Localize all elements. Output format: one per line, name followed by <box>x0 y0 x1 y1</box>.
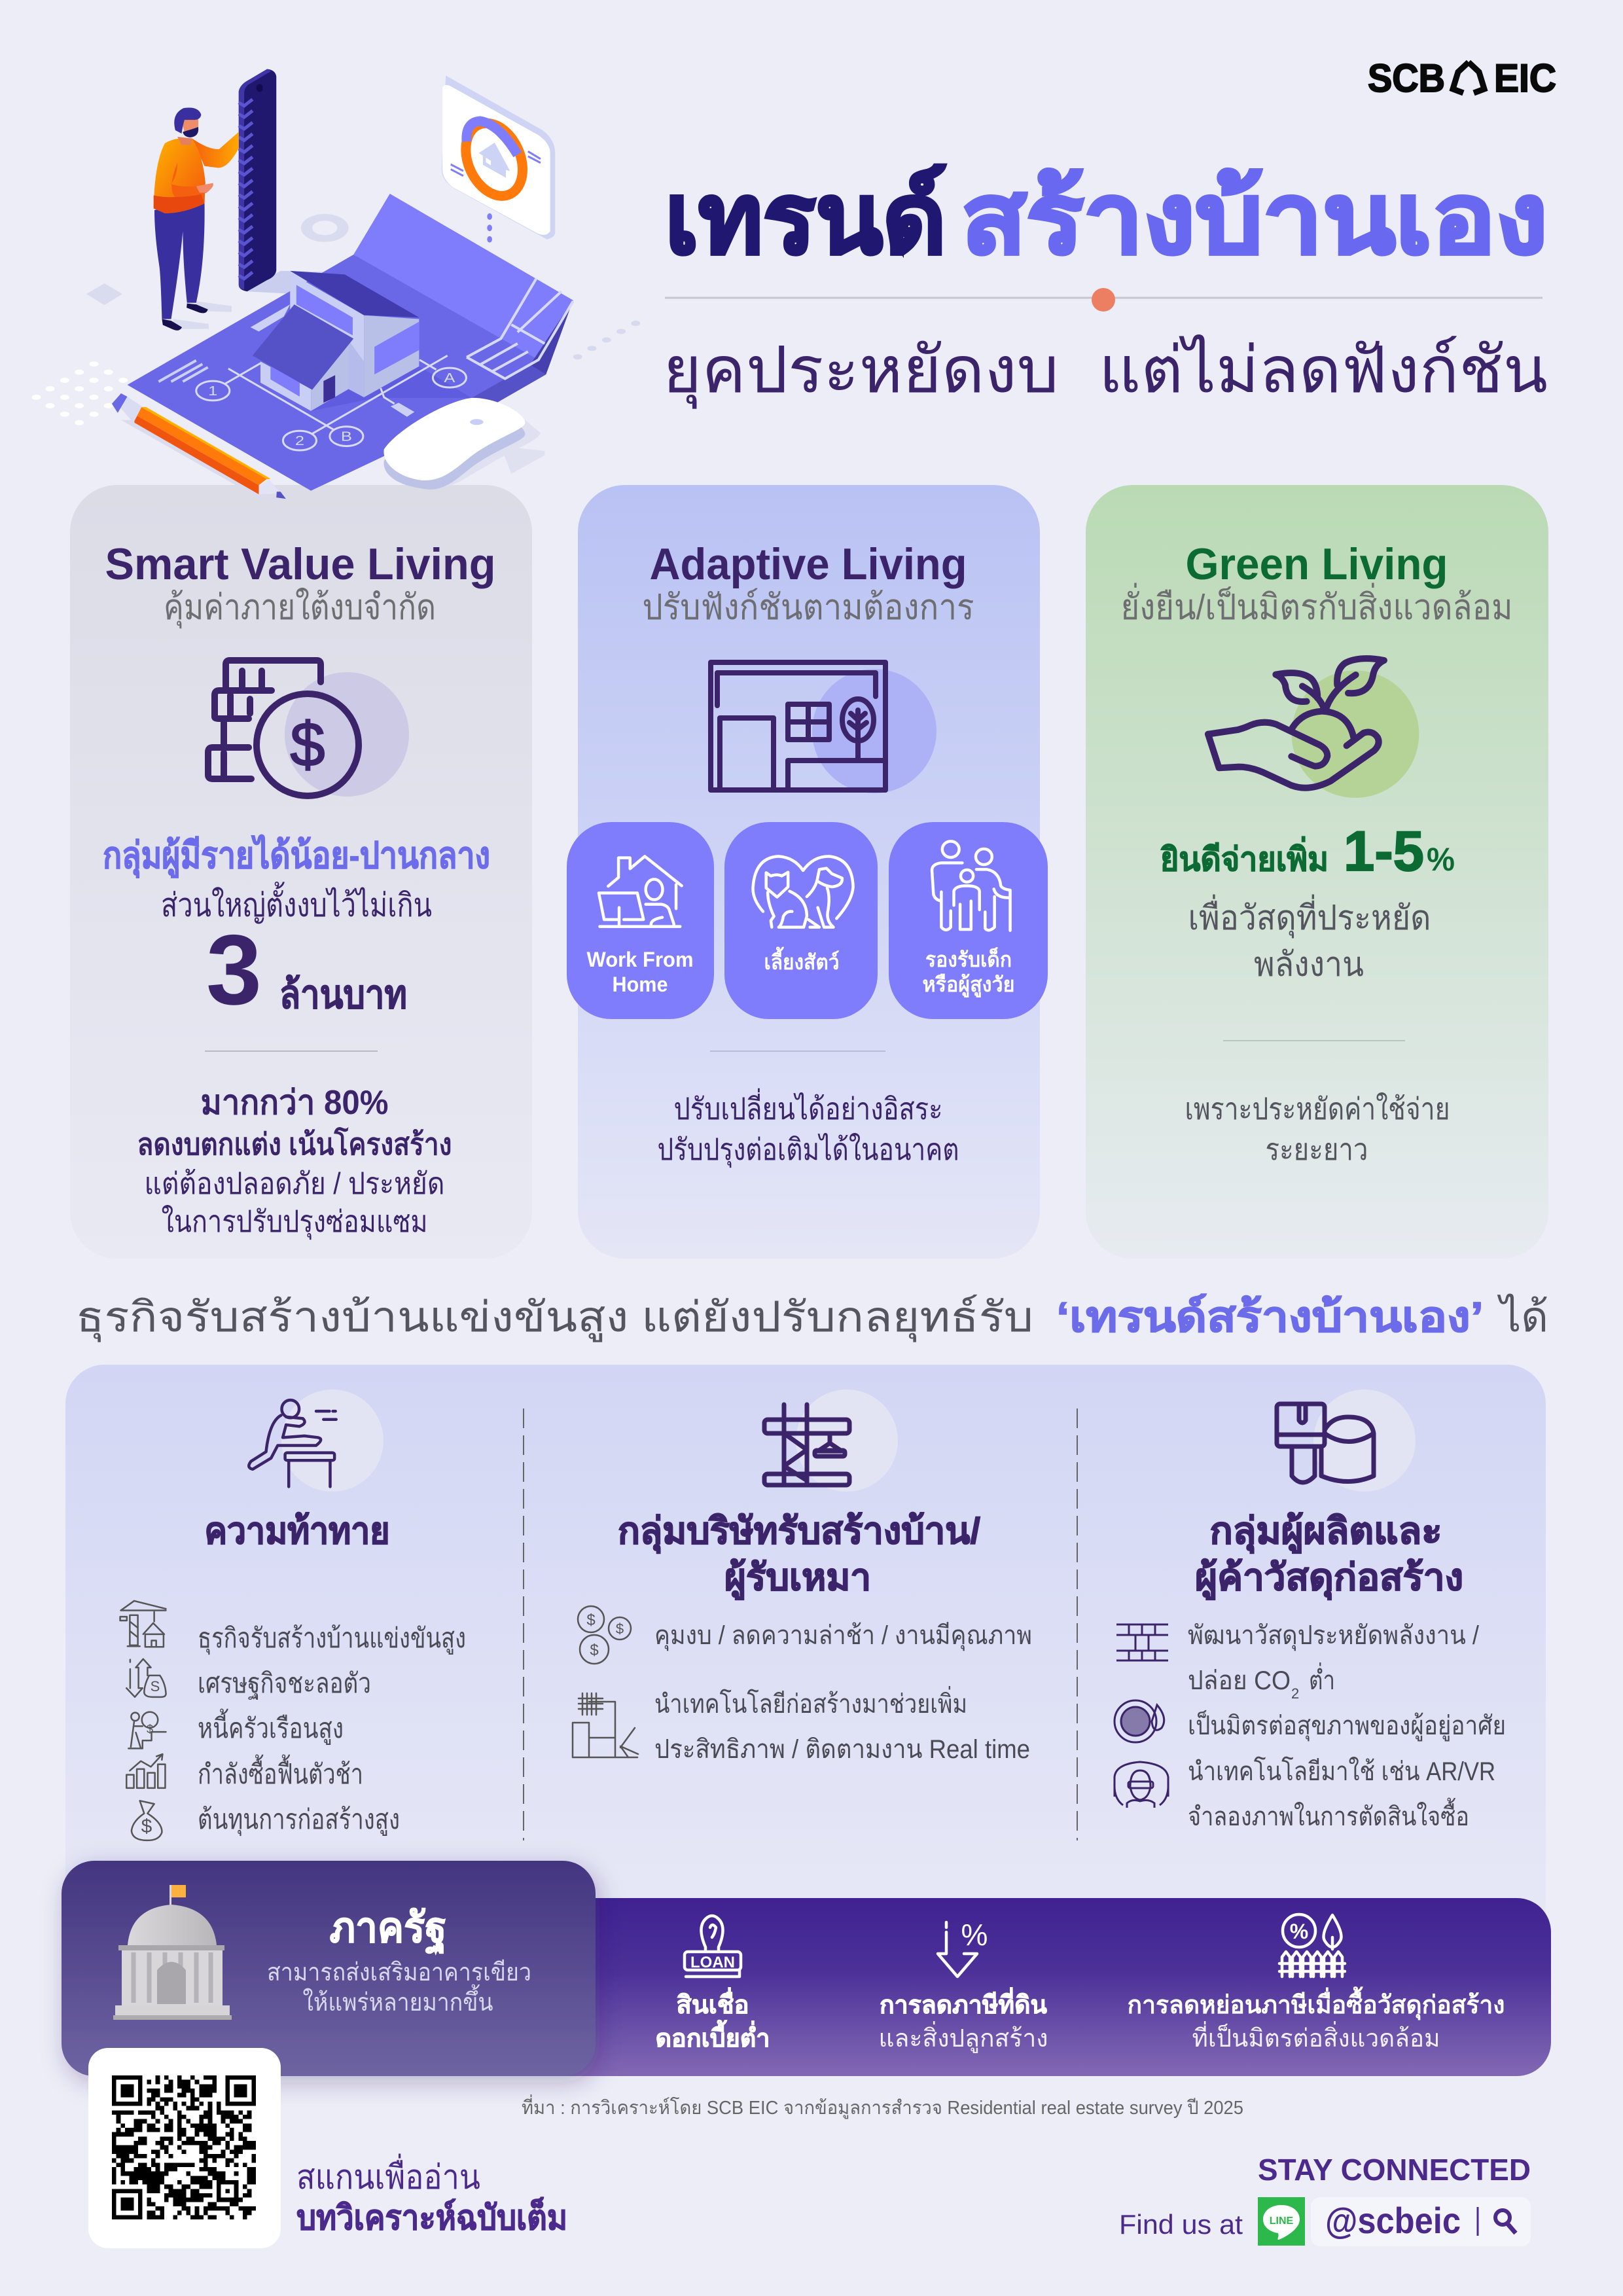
blueprint labels: 1 <box>208 384 217 398</box>
panel: business strategies <box>65 1365 1546 1954</box>
builder list: นำเทคโนโลยีก่อสร้างมาช่วยเพิ่ม <box>654 1686 967 1719</box>
icon: earth and leaf <box>1115 1700 1164 1742</box>
column: material suppliers <box>1115 1390 1506 1831</box>
panel: Smart Value Living: แต่ต้องปลอดภัย / ประหยัด <box>144 1166 445 1200</box>
illustration: house blueprint and man <box>31 69 640 507</box>
heading: STAY CONNECTED <box>1258 2153 1531 2187</box>
icon glyphs: S <box>151 1678 160 1695</box>
icon glyphs <box>141 1678 160 1837</box>
icon: home office <box>599 856 682 927</box>
dots <box>31 361 128 425</box>
banner: government measures: ดอกเบี้ยต่ำ <box>656 2020 770 2053</box>
card: Work From Home <box>567 822 714 1019</box>
icon: coins: $ <box>586 1611 596 1629</box>
challenge list: เศรษฐกิจชะลอตัว <box>198 1668 371 1700</box>
section heading: ธุรกิจรับสร้างบ้านแข่งขันสูง แต่ยังปรับกลยุทธ์รับ <box>76 1293 1033 1342</box>
heading: กลุ่มบริษัทรับสร้างบ้าน/ <box>618 1510 980 1554</box>
column: home builders <box>573 1390 1032 1764</box>
challenge list: กำลังซื้อฟื้นตัวช้า <box>198 1754 363 1789</box>
budget unit: ล้านบาท <box>279 973 407 1016</box>
icon: loan stamp <box>685 1916 741 1977</box>
icon: down arrow percent: % <box>961 1918 988 1952</box>
source note: ที่มา : การวิเคราะห์โดย SCB EIC จากข้อมูลการสำรวจ Residential real estate survey ปี 2025 <box>522 2094 1243 2119</box>
energy text: เพื่อวัสดุที่ประหยัด <box>1188 894 1431 939</box>
blueprint labels: B <box>341 429 352 444</box>
budget line: ส่วนใหญ่ตั้งงบไว้ไม่เกิน <box>161 882 432 924</box>
stay connected block <box>1119 2153 1531 2246</box>
detail text: ลดงบตกแต่ง เน้นโครงสร้าง <box>137 1126 452 1161</box>
man <box>173 301 232 329</box>
icon: percent leaf fence <box>1279 1914 1345 1977</box>
blueprint labels <box>208 370 455 448</box>
challenge list <box>198 1623 466 1837</box>
board card <box>442 75 555 240</box>
willingness to pay: % <box>1427 841 1455 878</box>
icon: construction technology <box>573 1693 638 1757</box>
supplier list: ต่ำ <box>1309 1662 1335 1695</box>
card: family <box>889 822 1048 1019</box>
heading: กลุ่มผู้ผลิตและ <box>1209 1510 1442 1554</box>
search box: @scbeic <box>1325 2200 1461 2241</box>
builder list: ประสิทธิภาพ / ติดตามงาน Real time <box>654 1735 1030 1764</box>
heading: Green Living: Green Living <box>1186 539 1448 589</box>
icon: hand with seedling <box>1208 658 1419 798</box>
icon: paint brush and can <box>1277 1390 1416 1492</box>
body text: ปรับเปลี่ยนได้อย่างอิสระ <box>674 1088 942 1126</box>
icon: brick wall <box>1116 1624 1168 1660</box>
find us text: Find us at <box>1119 2209 1243 2240</box>
QR code <box>112 2077 256 2217</box>
card: government sector: ให้แพร่หลายมากขึ้น <box>302 1984 493 2017</box>
label: Work From <box>586 948 694 971</box>
mouse <box>501 446 544 474</box>
supplier list: พัฒนาวัสดุประหยัดพลังงาน / <box>1188 1621 1480 1651</box>
budget number: 3 <box>206 914 262 1026</box>
banner: government measures <box>524 1898 1551 2076</box>
icon: flexible room <box>711 662 936 793</box>
supplier list: จำลองภาพในการตัดสินใจซื้อ <box>1188 1797 1469 1831</box>
logo: SCB EIC: EIC <box>1494 56 1556 100</box>
column: home builders: ผู้รับเหมา <box>724 1556 871 1600</box>
panel: Green Living <box>1086 485 1548 1259</box>
icon: percent leaf fence: % <box>1290 1920 1308 1943</box>
reason text: เพราะประหยัดค่าใช้จ่าย <box>1185 1092 1450 1126</box>
ruler shadow <box>246 271 323 294</box>
QR code card <box>88 2048 281 2248</box>
ruler <box>239 69 276 291</box>
card: Work From Home: Home <box>613 973 668 996</box>
label: เลี้ยงสัตว์ <box>764 946 839 974</box>
target group text: กลุ่มผู้มีรายได้น้อย-ปานกลาง <box>103 834 490 878</box>
challenge list: หนี้ครัวเรือนสูง <box>198 1708 344 1745</box>
supplier list: ปล่อย CO <box>1188 1666 1291 1695</box>
panel: Green Living: ระยะยาว <box>1266 1132 1368 1166</box>
icon: coins: $ <box>616 1621 624 1637</box>
banner: government measures: และสิ่งปลูกสร้าง <box>878 2021 1048 2053</box>
heading: ภาครัฐ <box>330 1904 446 1954</box>
logo: SCB EIC: SCB <box>1368 56 1445 100</box>
card: government sector <box>62 1861 596 2076</box>
subheading: ยั่งยืน/เป็นมิตรกับสิ่งแวดล้อม <box>1120 583 1513 627</box>
title divider with dot <box>665 288 1543 312</box>
icon: down arrow percent <box>938 1918 988 1977</box>
willingness to pay: ยินดีจ่ายเพิ่ม <box>1160 836 1329 878</box>
icon: coins: $ <box>590 1641 599 1659</box>
willingness to pay <box>1160 820 1455 883</box>
title: สร้างบ้านเอง <box>961 164 1548 274</box>
blueprint <box>353 194 573 374</box>
scan text <box>296 2153 567 2237</box>
subheading: คุ้มค่าภายใต้งบจำกัด <box>164 587 436 629</box>
icon: bricks and coin: $ <box>290 709 325 780</box>
challenge list: ธุรกิจรับสร้างบ้านแข่งขันสูง <box>198 1623 466 1655</box>
panel: Adaptive Living: ปรับปรุงต่อเติมได้ในอนาคต <box>657 1132 959 1168</box>
section heading <box>76 1293 1548 1342</box>
subtitle: ยุคประหยัดงบ <box>663 334 1059 409</box>
challenge list: ต้นทุนการก่อสร้างสูง <box>198 1804 400 1837</box>
card: family: หรือผู้สูงวัย <box>923 973 1014 998</box>
supplier list: เป็นมิตรต่อสุขภาพของผู้อยู่อาศัย <box>1188 1710 1506 1742</box>
panel: Adaptive Living <box>567 485 1048 1259</box>
label: รองรับเด็ก <box>925 946 1012 971</box>
pencil <box>121 420 288 507</box>
stamp label: LOAN <box>690 1954 735 1971</box>
icon: coins <box>578 1606 631 1664</box>
section heading: ‘เทรนด์สร้างบ้านเอง’ <box>1056 1293 1484 1340</box>
supplier list: นำเทคโนโลยีมาใช้ เช่น AR/VR <box>1188 1756 1495 1786</box>
percent text: มากกว่า 80% <box>200 1084 389 1122</box>
icon: crane <box>764 1390 898 1492</box>
icon: family generations <box>932 841 1010 931</box>
icon: VR headset person <box>1115 1762 1168 1808</box>
icon: LINE <box>1258 2197 1305 2246</box>
heading: Smart Value Living: Smart Value Living <box>105 539 496 589</box>
title: เทรนด์ <box>665 164 946 274</box>
subheading: ปรับฟังก์ชันตามต้องการ <box>643 588 974 627</box>
column: challenges <box>120 1390 466 1840</box>
card: pets <box>724 822 878 1019</box>
icon: runner hurdle <box>249 1390 383 1492</box>
list icons <box>120 1601 166 1840</box>
section heading: ได้ <box>1497 1293 1548 1340</box>
banner: government measures: ที่เป็นมิตรต่อสิ่งแวดล้อม <box>1192 2021 1440 2053</box>
blueprint labels: A <box>444 370 455 385</box>
logo: SCB EIC <box>1368 56 1556 100</box>
description: สามารถส่งเสริมอาคารเขียว <box>267 1959 531 1986</box>
icon: government building <box>113 1885 232 2020</box>
icon glyphs: $ <box>147 1723 153 1736</box>
text: low interest loan: สินเชื่อ <box>677 1987 749 2019</box>
icon: LINE: LINE <box>1270 2215 1294 2227</box>
icon: bricks and coin <box>208 660 409 797</box>
builder list: คุมงบ / ลดความล่าช้า / งานมีคุณภาพ <box>654 1621 1032 1651</box>
blueprint labels: 2 <box>295 433 304 448</box>
builder list <box>654 1621 1032 1764</box>
supplier list: 2 <box>1291 1685 1299 1702</box>
subtitle: แต่ไม่ลดฟังก์ชัน <box>1099 334 1548 406</box>
panel: Smart Value Living: ในการปรับปรุงซ่อมแซม <box>161 1204 428 1240</box>
heading: Adaptive Living: Adaptive Living <box>649 539 967 589</box>
house <box>290 273 364 397</box>
heading: ความท้าทาย <box>204 1510 390 1551</box>
column: material suppliers: ผู้ค้าวัสดุก่อสร้าง <box>1195 1556 1463 1600</box>
supplier list <box>1188 1621 1506 1831</box>
search box <box>1311 2197 1531 2246</box>
scan text: สแกนเพื่ออ่าน <box>296 2153 480 2197</box>
scan text: บทวิเคราะห์ฉบับเต็ม <box>296 2197 567 2237</box>
text: land tax reduction: การลดภาษีที่ดิน <box>880 1987 1047 2019</box>
willingness to pay: 1-5 <box>1344 820 1424 883</box>
icon glyphs: $ <box>141 1816 152 1837</box>
icon: cat and dog heart <box>753 856 853 927</box>
text: tax deduction: การลดหย่อนภาษีเมื่อซื้อวัสดุก่อสร้าง <box>1127 1986 1505 2020</box>
panel: Green Living: พลังงาน <box>1254 946 1364 984</box>
panel: Smart Value Living <box>70 485 532 1259</box>
